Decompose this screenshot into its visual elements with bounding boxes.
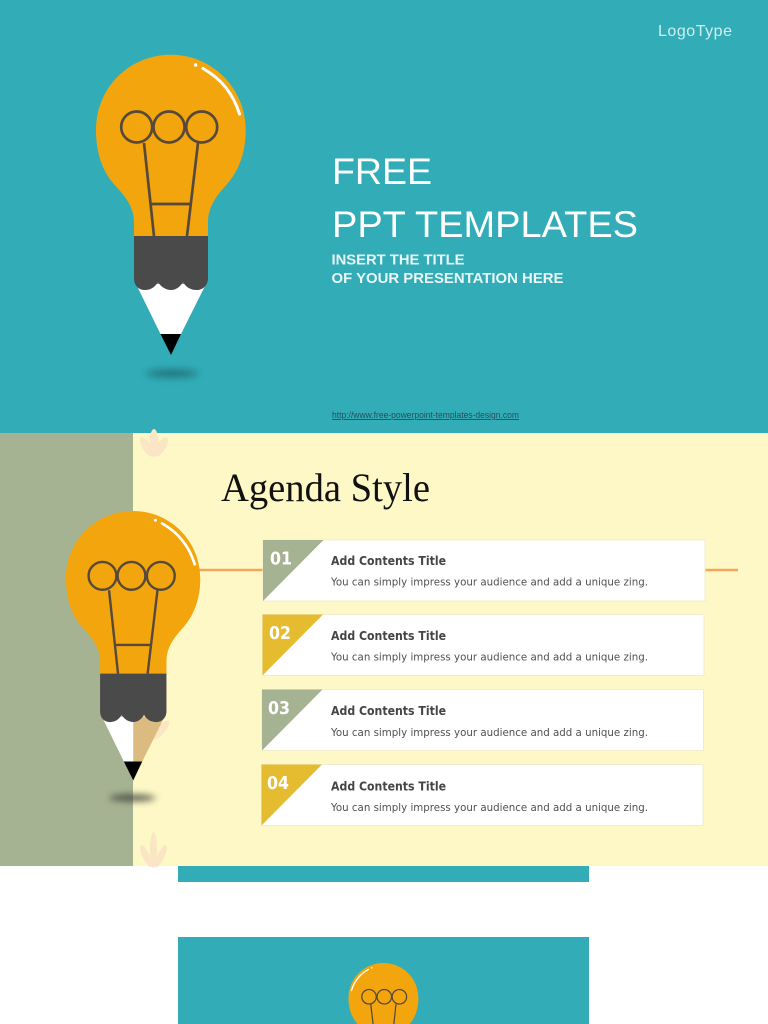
green sidebar (0, 433, 133, 866)
subtitle (332, 252, 564, 287)
subtitle: OF YOUR PRESENTATION HERE (332, 271, 564, 287)
heading: free ppt templates: FREE (332, 151, 432, 192)
subtitle: INSERT THE TITLE (332, 252, 465, 268)
agenda item 02: You can simply impress your audience and add a unique zing. (330, 652, 648, 664)
logotype: LogoType (658, 23, 732, 40)
heading: free ppt templates: PPT TEMPLATES (332, 204, 638, 245)
agenda item 03: 03 (268, 699, 290, 719)
icon: lightbulb pencil on agenda (66, 511, 200, 801)
agenda item 04: 04 (267, 774, 289, 794)
panel: agenda slide (0, 429, 768, 868)
agenda item 04: You can simply impress your audience and add a unique zing. (330, 802, 648, 814)
decorative leaves (137, 429, 172, 868)
panel: title slide (0, 0, 768, 433)
icon: lightbulb pencil (96, 55, 246, 377)
agenda item 03 (262, 690, 704, 750)
agenda item 03: Add Contents Title (331, 703, 446, 718)
icon: small lightbulb (348, 963, 418, 1024)
agenda item 02: Add Contents Title (331, 628, 446, 643)
agenda item 01 (263, 540, 705, 601)
website link: http://www.free-powerpoint-templates-design.com (332, 410, 519, 420)
agenda item 03: You can simply impress your audience and add a unique zing. (330, 727, 648, 739)
agenda item 02 (262, 614, 704, 676)
agenda item 02: 02 (269, 624, 291, 644)
heading: free ppt templates (332, 151, 638, 245)
agenda item 01: Add Contents Title (331, 553, 446, 568)
connector line (198, 569, 738, 571)
agenda item 04 (262, 764, 703, 826)
panel: previous slide bottom edge (178, 866, 589, 882)
agenda item 01: 01 (270, 550, 292, 570)
agenda item 01: You can simply impress your audience and add a unique zing. (330, 576, 648, 588)
panel: next slide (178, 937, 589, 1024)
agenda item 04: Add Contents Title (331, 778, 446, 794)
heading: agenda style: Agenda Style (221, 465, 430, 510)
